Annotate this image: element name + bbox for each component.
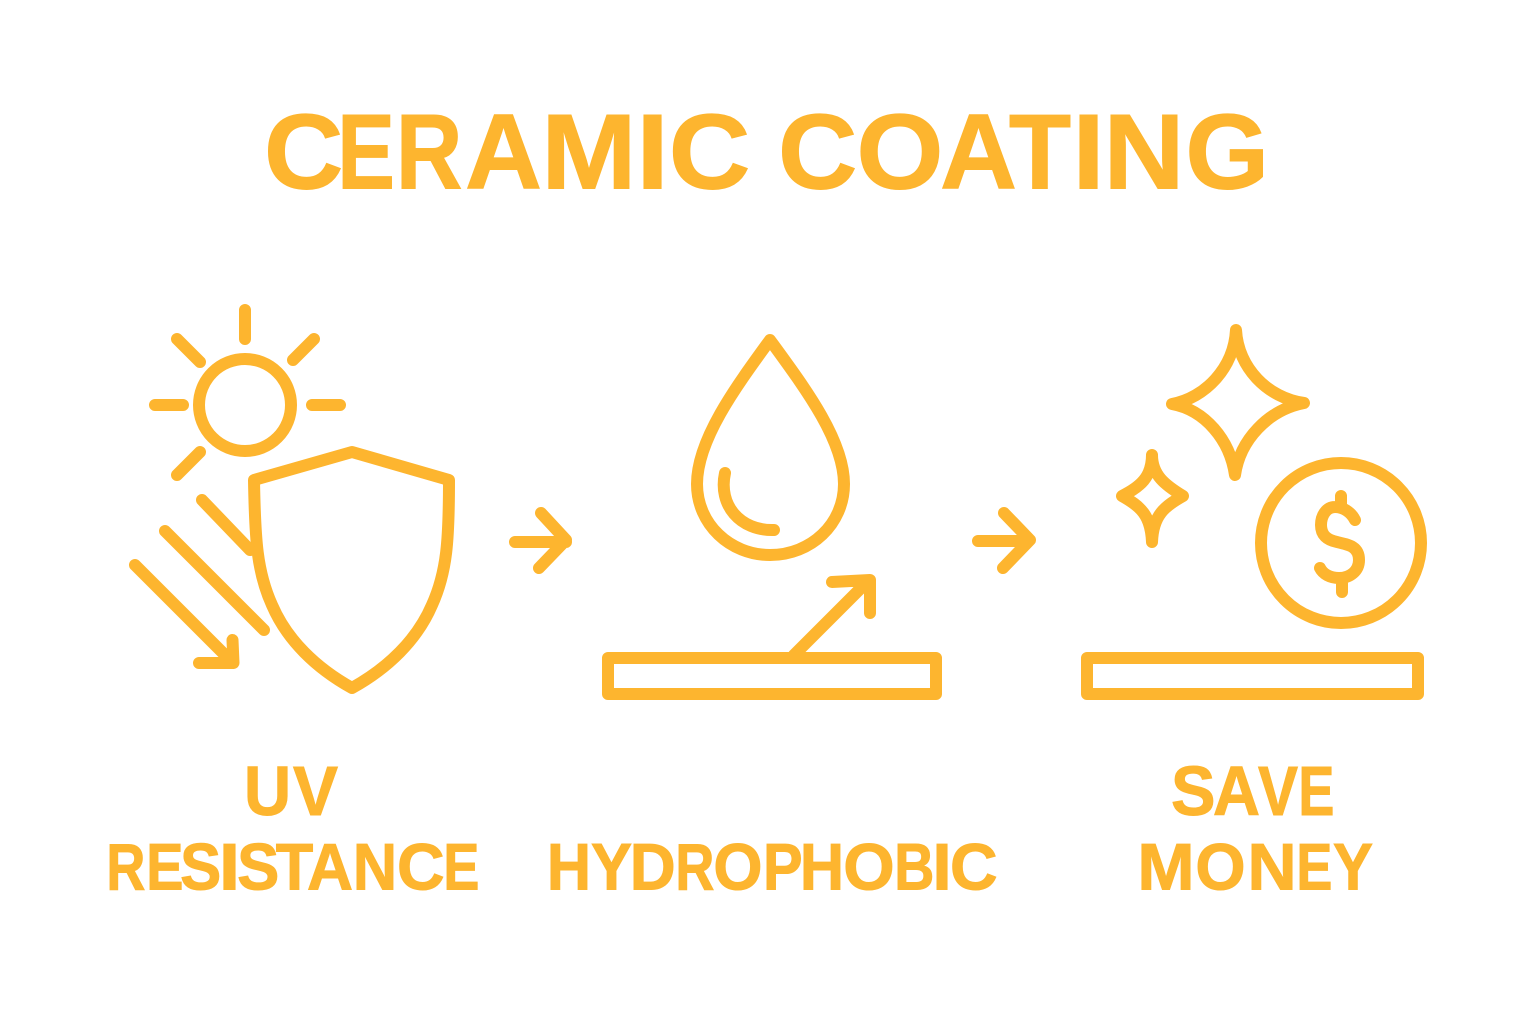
label: UV Resistance: S: [180, 830, 221, 904]
title: A: [940, 92, 1017, 212]
label: Hydrophobic: Y: [591, 830, 632, 904]
label: UV Resistance: A: [307, 830, 353, 904]
title: A: [465, 92, 542, 212]
title: G: [1185, 92, 1269, 212]
label: Hydrophobic: O: [843, 830, 895, 904]
label: Save Money: O: [1195, 830, 1246, 904]
label: Save Money: [1137, 752, 1373, 904]
label: UV Resistance: [106, 752, 479, 904]
title: C: [669, 92, 750, 212]
title: I: [636, 92, 669, 212]
arrow: second: [978, 513, 1030, 568]
title: C: [778, 92, 857, 212]
label: Save Money: E: [1296, 830, 1332, 904]
icon: sun: [155, 310, 340, 475]
label: Hydrophobic: D: [630, 830, 676, 904]
label: Save Money: E: [1298, 752, 1334, 830]
arrow: first: [515, 513, 566, 568]
label: UV Resistance: E: [146, 830, 184, 904]
label: UV Resistance: T: [276, 830, 313, 904]
label: Save Money: Y: [1333, 830, 1373, 904]
label: UV Resistance: N: [353, 830, 397, 904]
label: UV Resistance: C: [397, 830, 445, 904]
icon: sparkles and coin: [1087, 330, 1421, 694]
label: Save Money: M: [1137, 830, 1195, 904]
title: C: [264, 92, 343, 212]
title: M: [541, 92, 637, 212]
title: T: [1009, 92, 1071, 212]
label: Hydrophobic: P: [763, 830, 803, 904]
label: UV Resistance: V: [293, 752, 338, 830]
label: Save Money: S: [1171, 752, 1216, 830]
title: E: [337, 92, 395, 212]
label: UV Resistance: R: [106, 830, 145, 904]
label: Hydrophobic: H: [800, 830, 844, 904]
title: R: [396, 92, 462, 212]
label: Hydrophobic: H: [547, 830, 591, 904]
label: Hydrophobic: C: [950, 830, 998, 904]
title: O: [856, 92, 944, 212]
label: UV Resistance: S: [237, 830, 279, 904]
label: Hydrophobic: O: [713, 830, 762, 904]
label: Hydrophobic: I: [932, 830, 952, 904]
label: Save Money: N: [1248, 830, 1297, 904]
label: Hydrophobic: R: [675, 830, 714, 904]
label: UV Resistance: U: [244, 752, 291, 830]
label: UV Resistance: I: [219, 830, 240, 904]
label: Hydrophobic: B: [894, 830, 934, 904]
label: UV Resistance: E: [443, 830, 479, 904]
title: I: [1072, 92, 1105, 212]
icon: shield with UV rays: [135, 452, 449, 688]
icon: water drop on surface: [608, 340, 936, 694]
title: N: [1104, 92, 1184, 212]
label: Save Money: A: [1213, 752, 1260, 830]
label: Save Money: V: [1258, 752, 1298, 830]
